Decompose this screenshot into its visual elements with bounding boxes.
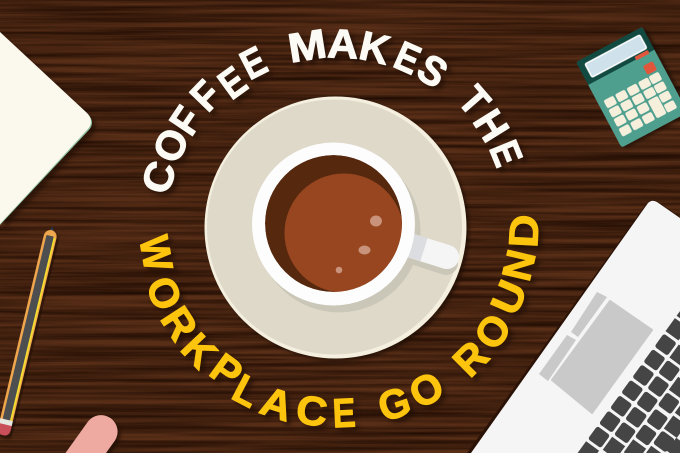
title: coffee makes the: F xyxy=(182,72,231,120)
title: coffee makes the: A xyxy=(326,20,360,67)
title: workplace go round: L xyxy=(225,366,267,417)
coffee cup xyxy=(252,142,447,312)
title: coffee makes the: O xyxy=(143,121,198,170)
laptop trackpad xyxy=(552,301,652,413)
title: coffee makes the: E xyxy=(233,38,274,89)
cup shadow xyxy=(258,150,446,312)
title: coffee makes the: S xyxy=(409,45,455,97)
calculator keys xyxy=(603,72,677,137)
title: workplace go round: O xyxy=(465,305,521,358)
title: workplace go round xyxy=(130,213,548,437)
notebook xyxy=(0,32,92,225)
coffee xyxy=(265,155,404,292)
title: coffee makes the: F xyxy=(161,98,212,143)
title: workplace go round: A xyxy=(255,377,299,430)
calculator xyxy=(576,27,680,148)
title: coffee makes the: K xyxy=(355,22,395,74)
saucer xyxy=(204,96,466,358)
title: workplace go round: D xyxy=(501,213,548,249)
cup handle xyxy=(406,244,447,257)
cup rim xyxy=(252,142,415,306)
title: coffee makes the: H xyxy=(464,102,517,150)
coffee bubbles xyxy=(336,216,382,273)
title: workplace go round: N xyxy=(493,245,545,285)
title: workplace go round: C xyxy=(294,386,330,435)
title: coffee makes the xyxy=(132,20,531,199)
title: coffee makes the: E xyxy=(387,33,427,84)
title: coffee makes the: T xyxy=(449,77,499,125)
title: coffee makes the: E xyxy=(211,58,256,109)
title: workplace go round: W xyxy=(130,232,180,275)
title: coffee makes the: C xyxy=(132,156,185,199)
eraser xyxy=(66,415,118,453)
title: coffee makes the: E xyxy=(480,135,531,173)
calculator red buttons xyxy=(634,50,658,76)
title: workplace go round: R xyxy=(152,299,206,349)
title: workplace go round: P xyxy=(202,344,251,397)
calculator screen xyxy=(585,35,647,77)
title: workplace go round: U xyxy=(482,274,537,321)
title: workplace go round: R xyxy=(444,332,498,386)
title: workplace go round: O xyxy=(137,270,191,317)
laptop trackpad buttons xyxy=(539,292,607,381)
title: coffee makes the: M xyxy=(285,21,330,72)
title: workplace go round: O xyxy=(401,362,451,418)
title: workplace go round: G xyxy=(372,377,416,431)
laptop keyboard xyxy=(578,311,680,453)
title: workplace go round: K xyxy=(172,324,226,378)
laptop xyxy=(467,200,680,453)
title: workplace go round: E xyxy=(332,391,357,437)
pencil xyxy=(0,225,59,437)
